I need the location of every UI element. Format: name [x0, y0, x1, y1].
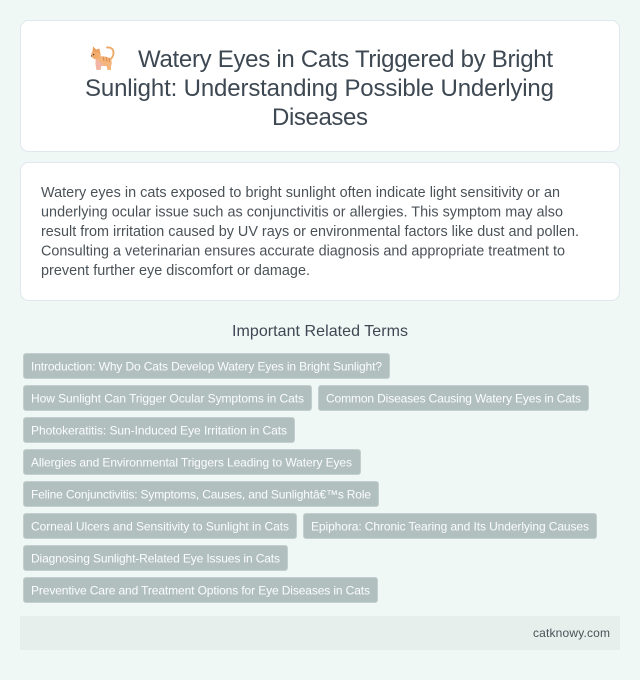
tag: corneal ulcers: Corneal Ulcers and Sensitivity to Sunlight in Cats: [31, 520, 289, 534]
icon: orange cat: [91, 46, 114, 70]
tag: preventive care: [24, 578, 378, 602]
tag: corneal ulcers: [24, 514, 296, 538]
tag: epiphora: Epiphora: Chronic Tearing and Its Underlying Causes: [311, 520, 589, 534]
footer source text: catknowy.com: [533, 626, 610, 640]
tag: how sunlight: How Sunlight Can Trigger Ocular Symptoms in Cats: [31, 392, 304, 406]
tag: introduction: Introduction: Why Do Cats Develop Watery Eyes in Bright Sunlight?: [31, 360, 382, 374]
title text: Sunlight: Understanding Possible Underlying: [85, 75, 554, 102]
summary text: [41, 185, 579, 279]
tag: allergies: Allergies and Environmental Triggers Leading to Watery Eyes: [31, 456, 352, 470]
tag: photokeratitis: [24, 418, 294, 442]
tag: diagnosing: [24, 546, 288, 570]
title text: Watery Eyes in Cats Triggered by Bright: [138, 46, 553, 73]
tag: photokeratitis: Photokeratitis: Sun-Induced Eye Irritation in Cats: [31, 424, 287, 438]
footer bar: [20, 616, 620, 650]
heading: important related terms: Important Related Terms: [232, 323, 408, 340]
summary text: Consulting a veterinarian ensures accurate diagnosis and appropriate treatment to: [41, 244, 565, 260]
tag: epiphora: [304, 514, 596, 538]
tag: feline conjunctivitis: [24, 482, 378, 506]
title text: Diseases: [272, 104, 368, 131]
tag: allergies: [24, 450, 360, 474]
tag: feline conjunctivitis: Feline Conjunctivitis: Symptoms, Causes, and Sunlightâ€™s Role: [31, 488, 371, 502]
summary text: result from irritation caused by UV rays or environmental factors like dust and pollen.: [41, 224, 579, 240]
tag: diagnosing: Diagnosing Sunlight-Related Eye Issues in Cats: [31, 552, 280, 566]
tag: common diseases: [318, 386, 588, 410]
tag: common diseases: Common Diseases Causing Watery Eyes in Cats: [326, 392, 581, 406]
summary text: underlying ocular issue such as conjunctivitis or allergies. This symptom may also: [41, 204, 563, 220]
title text: [85, 46, 554, 131]
summary text: Watery eyes in cats exposed to bright sunlight often indicate light sensitivity or an: [41, 185, 560, 201]
panel: title card: [20, 20, 620, 152]
tag: how sunlight: [24, 386, 312, 410]
tag: preventive care: Preventive Care and Treatment Options for Eye Diseases in Cats: [31, 584, 370, 598]
summary text: prevent further eye discomfort or damage.: [41, 263, 310, 279]
tag: introduction: [24, 354, 390, 378]
panel: summary paragraph: [20, 162, 620, 300]
